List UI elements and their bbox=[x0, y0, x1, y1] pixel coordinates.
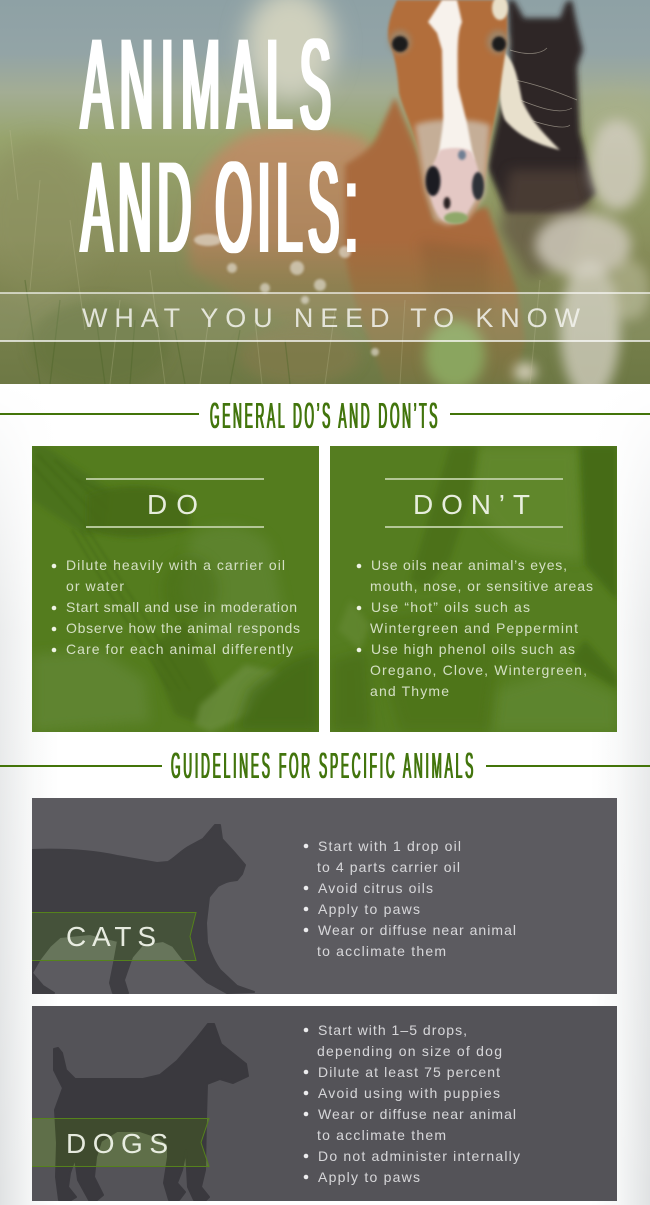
muzzle sides bbox=[415, 120, 490, 225]
panel: do bbox=[32, 446, 319, 732]
don't list: Wintergreen and Peppermint bbox=[370, 620, 578, 636]
don't list: Use high phenol oils such as bbox=[371, 641, 575, 657]
icon: dog silhouette bbox=[54, 1024, 248, 1200]
title bbox=[81, 12, 358, 280]
do list: Care for each animal differently bbox=[66, 641, 293, 657]
do list: Start small and use in moderation bbox=[66, 599, 297, 615]
don't list: Use oils near animal’s eyes, bbox=[371, 557, 567, 573]
mane bbox=[499, 52, 560, 150]
dark horse bbox=[487, 0, 597, 213]
dogs list bbox=[304, 1022, 520, 1185]
cats list: Start with 1 drop oil bbox=[318, 838, 461, 854]
do list bbox=[52, 557, 300, 657]
heading: general do's and don'ts: GENERAL DO’S AND DON’TS bbox=[210, 396, 437, 436]
cats list: Avoid citrus oils bbox=[318, 880, 433, 896]
cats list: Wear or diffuse near animal bbox=[318, 922, 516, 938]
don't list: Use “hot” oils such as bbox=[371, 599, 530, 615]
cats banner: CATS bbox=[66, 921, 156, 952]
dogs list: to acclimate them bbox=[317, 1127, 446, 1143]
do list: or water bbox=[66, 578, 124, 594]
cats list: Apply to paws bbox=[318, 901, 420, 917]
do heading: DO bbox=[147, 489, 198, 520]
dogs list: depending on size of dog bbox=[317, 1043, 502, 1059]
cats list: to 4 parts carrier oil bbox=[317, 859, 460, 875]
eye sockets bbox=[389, 30, 411, 54]
title: AND OILS: bbox=[81, 135, 358, 280]
cats banner bbox=[32, 912, 197, 961]
dogs list: Avoid using with puppies bbox=[318, 1085, 500, 1101]
meadow flowers and grass bbox=[10, 130, 540, 384]
don't list: and Thyme bbox=[370, 683, 449, 699]
meadow overlay bbox=[198, 261, 528, 384]
subtitle band bbox=[0, 292, 650, 342]
hero photo: horses in meadow bbox=[0, 0, 650, 400]
horse head bbox=[388, 0, 507, 225]
meadow foreground bbox=[30, 120, 650, 400]
don't list: mouth, nose, or sensitive areas bbox=[370, 578, 593, 594]
title: ANIMALS bbox=[81, 12, 331, 157]
horse body bbox=[184, 124, 371, 316]
dogs banner bbox=[32, 1118, 210, 1167]
don't list bbox=[357, 557, 593, 699]
blaze bbox=[428, 0, 474, 160]
dogs list: Start with 1–5 drops, bbox=[318, 1022, 467, 1038]
do list: Dilute heavily with a carrier oil bbox=[66, 557, 285, 573]
don't list: Oregano, Clove, Wintergreen, bbox=[370, 662, 587, 678]
cats list: to acclimate them bbox=[317, 943, 446, 959]
heading: guidelines for specific animals: GUIDELINES FOR SPECIFIC ANIMALS bbox=[171, 746, 473, 786]
panel: cats bbox=[32, 798, 617, 994]
dogs list: Dilute at least 75 percent bbox=[318, 1064, 500, 1080]
panel: dogs bbox=[32, 1006, 617, 1201]
muzzle bbox=[429, 148, 480, 223]
dogs banner: DOGS bbox=[66, 1128, 168, 1159]
icon: cat silhouette bbox=[32, 825, 254, 993]
do list: Observe how the animal responds bbox=[66, 620, 300, 636]
dogs list: Do not administer internally bbox=[318, 1148, 520, 1164]
dogs list: Apply to paws bbox=[318, 1169, 420, 1185]
dogs list: Wear or diffuse near animal bbox=[318, 1106, 516, 1122]
horse neck and chest bbox=[345, 97, 525, 384]
don't heading: DON’T bbox=[413, 489, 530, 520]
cats list bbox=[304, 838, 516, 959]
subtitle: WHAT YOU NEED TO KNOW bbox=[82, 303, 581, 333]
panel: don't bbox=[330, 446, 617, 732]
